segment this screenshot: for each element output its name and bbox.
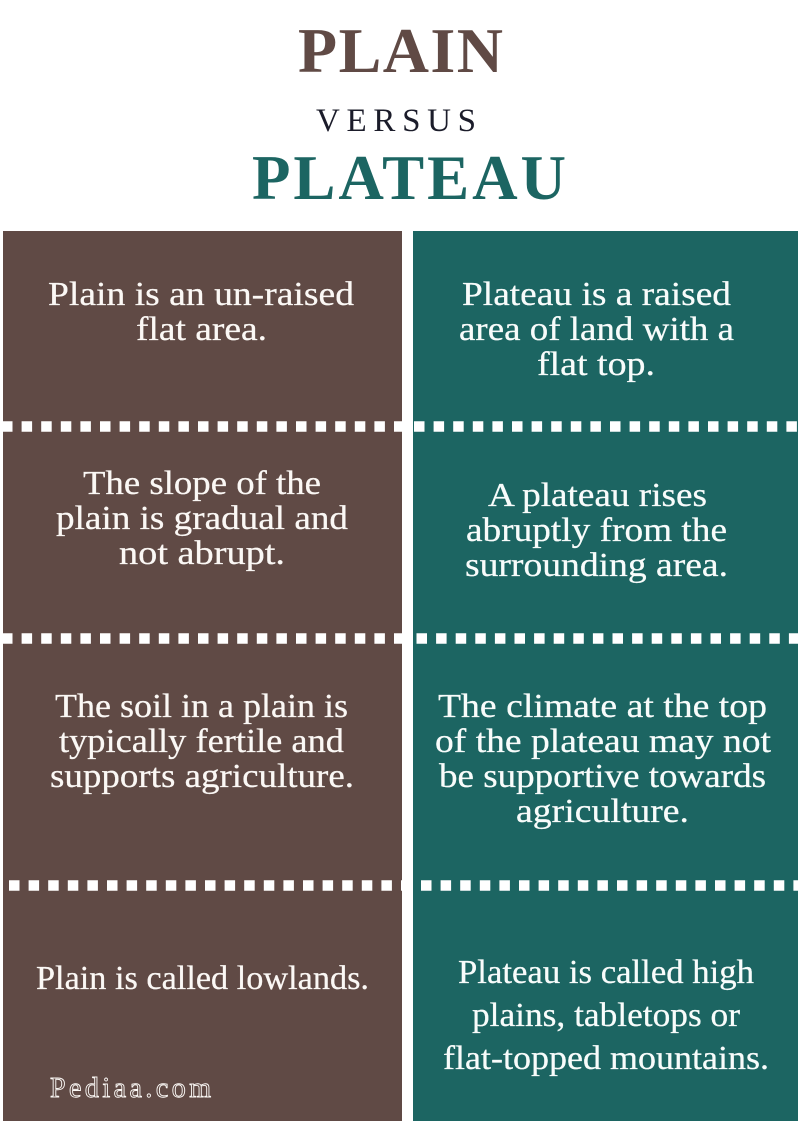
panel: plateau column — [413, 231, 798, 1121]
text: plateau definition: flat top. — [537, 346, 655, 383]
text: plain slope: The slope of the — [83, 465, 321, 502]
text: plateau definition: Plateau is a raised — [462, 276, 731, 313]
text: plateau definition: area of land with a — [459, 311, 734, 348]
text: plateau names: flat-topped mountains. — [443, 1040, 769, 1077]
text: plain slope — [56, 465, 348, 572]
text: plain soil: supports agriculture. — [50, 758, 354, 795]
text: plain soil: The soil in a plain is — [55, 688, 348, 725]
logo: pediaa.com: Pediaa.com — [50, 1073, 211, 1104]
text: plain slope: not abrupt. — [119, 535, 285, 572]
text: plateau climate: agriculture. — [516, 793, 689, 830]
subtitle: versus: VERSUS — [316, 103, 476, 139]
text: plain definition: flat area. — [136, 311, 267, 348]
panel: plain column — [3, 231, 402, 1121]
text: plain names: Plain is called lowlands. — [36, 960, 369, 997]
text: plateau definition — [459, 276, 734, 383]
text: plateau rise: A plateau rises — [488, 477, 707, 514]
text: plateau rise: surrounding area. — [465, 547, 728, 584]
text: plain soil — [50, 688, 354, 795]
title: plateau: PLATEAU — [252, 143, 566, 213]
title: plain: PLAIN — [298, 15, 503, 86]
text: plateau rise — [465, 477, 728, 584]
text: plateau names: Plateau is called high — [458, 954, 754, 991]
text: plateau names: plains, tabletops or — [472, 997, 741, 1034]
text: plain definition — [48, 276, 354, 348]
text: plateau climate: The climate at the top — [438, 688, 767, 725]
text: plateau climate: of the plateau may not — [435, 723, 772, 760]
text: plateau rise: abruptly from the — [466, 512, 727, 549]
text: plain definition: Plain is an un-raised — [48, 276, 354, 313]
text: plateau climate: be supportive towards — [439, 758, 766, 795]
text: plateau names — [443, 954, 769, 1077]
dividers — [2, 421, 402, 432]
text: plain slope: plain is gradual and — [56, 500, 348, 537]
text: plateau climate — [435, 688, 772, 830]
text: plain soil: typically fertile and — [59, 723, 344, 760]
